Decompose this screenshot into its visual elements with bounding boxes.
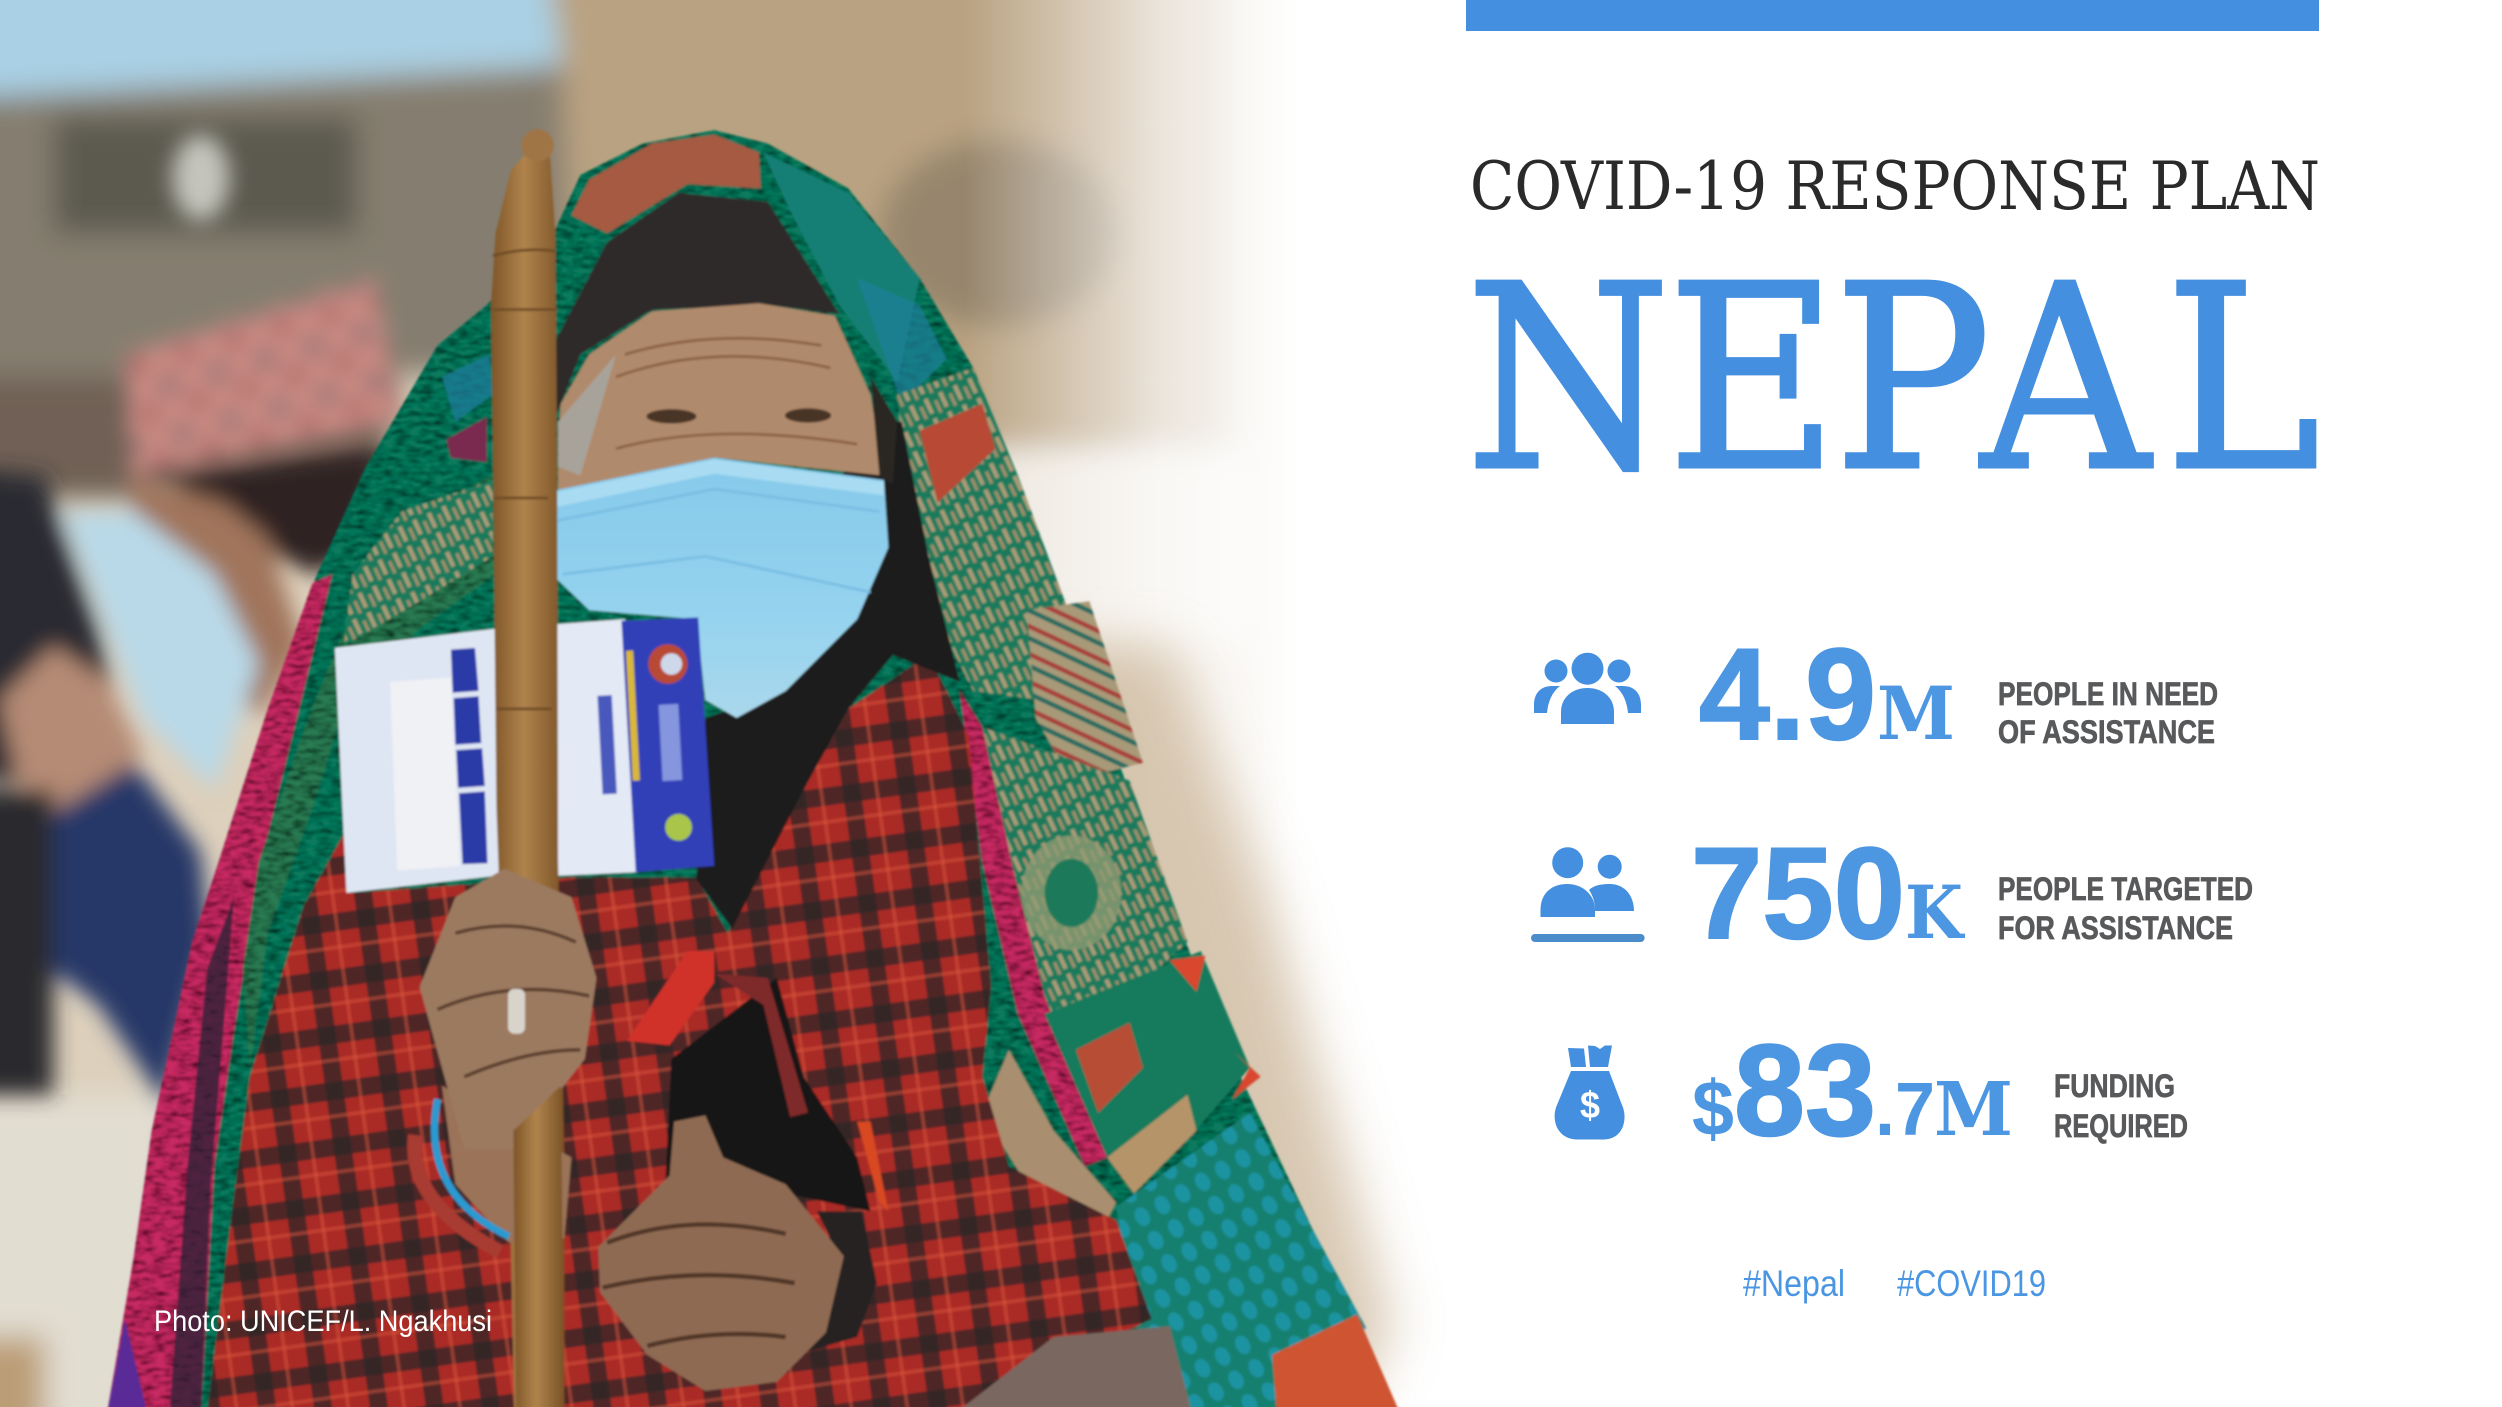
label: people targeted: FOR ASSISTANCE [1998,910,2233,946]
label: people in need: PEOPLE IN NEED [1998,676,2218,712]
stat: funding required [1555,1017,2188,1163]
icon: money bag: $ [1580,1085,1600,1127]
black sweater and dark chest opening [627,422,960,1211]
staff [491,129,564,1407]
woman figure [107,129,1400,1407]
number: $83.7M: M [1934,1067,2013,1153]
label: people targeted [1998,871,2253,946]
second hand and watch [598,1115,877,1391]
bracelets and wrist [414,1086,571,1252]
icon: money bag [1555,1046,1625,1140]
photo credit: Photo: UNICEF/L. Ngakhusi [154,1305,492,1338]
plaid shirt [207,655,1152,1407]
label: funding required [2054,1068,2188,1144]
blurred street background [0,0,1679,1407]
face mask [548,458,888,718]
label: funding required: REQUIRED [2054,1108,2188,1144]
shawl [107,130,1400,1407]
label: funding required: FUNDING [2054,1068,2175,1104]
number: $83.7M: $ [1692,1064,1734,1152]
number: 4.9M: 4.9 [1699,621,1876,767]
title: NEPAL [1466,231,2321,527]
photo: woman in shawl holding a card and a staff [0,0,1679,1407]
label: people in need [1998,676,2218,750]
number: $83.7M: 83 [1734,1017,1876,1163]
label: people in need: OF ASSISTANCE [1998,714,2215,750]
subtitle: COVID-19 RESPONSE PLAN [1470,148,2320,225]
hashtags [1743,1263,2046,1304]
icon: two people on a bar [1531,847,1645,942]
number: $83.7M [1692,1017,2013,1163]
head: cap and face [554,193,897,494]
label: people targeted: PEOPLE TARGETED [1998,871,2253,907]
number: 750K: K [1905,870,1965,956]
hashtags: #Nepal [1743,1263,1845,1304]
number: 750K: 750 [1691,820,1905,966]
hashtags: #COVID19 [1897,1263,2046,1304]
knee [955,1326,1192,1407]
stat: people in need [1534,621,2218,767]
card [335,617,714,893]
stat: people targeted [1531,820,2253,966]
top bar [1466,0,2319,31]
icon: three people [1534,653,1641,724]
number: 4.9M: M [1877,671,1955,757]
number: $83.7M: .7 [1875,1067,1935,1151]
staff below hand [513,1086,564,1407]
hand on staff [420,869,596,1149]
